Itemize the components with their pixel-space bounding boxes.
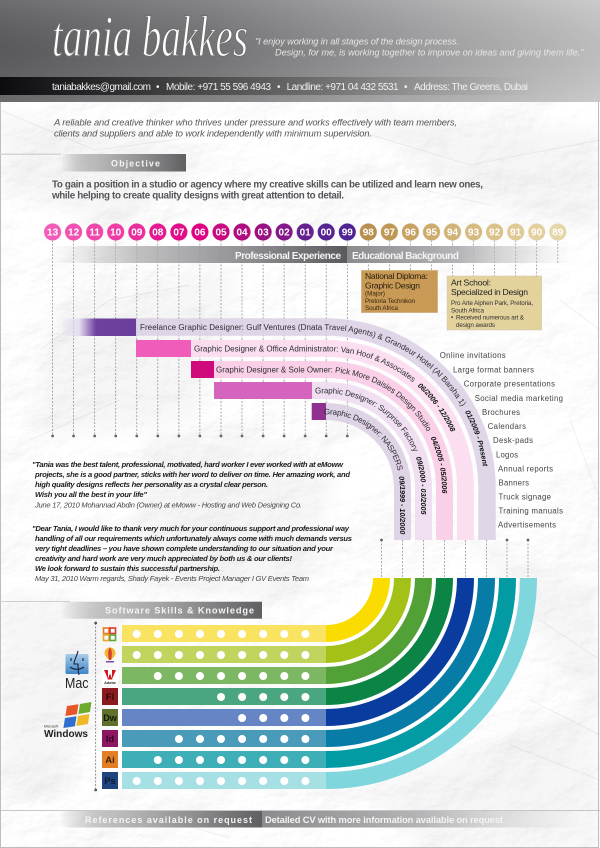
testimonial 1 <box>32 460 350 510</box>
objective text: To gain a position in a studio or agency where my creative skills can be utilized and learn new ones, <box>52 179 483 190</box>
name: tania bakkes <box>52 4 248 69</box>
list of design services: Brochures <box>482 408 520 417</box>
education box: national diploma <box>361 270 438 313</box>
icon: flash: Fl <box>106 692 114 703</box>
windows logo: Microsoft <box>44 724 58 728</box>
software icon column <box>94 622 118 791</box>
experience band 4: surprise factory <box>214 382 432 540</box>
software skills heading <box>0 601 262 619</box>
skills rainbow arcs <box>326 578 528 780</box>
experience band 5: naspers: 09/1999 - 10/2000 <box>399 476 406 534</box>
year circles: 08 <box>152 228 164 239</box>
testimonial 1: high quality designs reflects her personality as a crystal clear person. <box>35 480 268 489</box>
year circles: 07 <box>173 228 185 239</box>
year circles: 12 <box>68 228 80 239</box>
section bar: professional experience: Professional Experience <box>235 251 341 262</box>
education box: national diploma: National Diploma: <box>365 271 428 281</box>
icon: indesign <box>102 730 118 747</box>
contact details <box>52 82 528 93</box>
objective heading: Objective <box>111 159 160 169</box>
year circles: 98 <box>363 228 374 239</box>
icon: adobe: Adobe <box>104 681 116 685</box>
section bar: professional experience <box>50 246 347 263</box>
education box: art school: • <box>451 315 453 322</box>
education box: national diploma: (Major) <box>365 290 385 298</box>
experience band 1: freelance: Freelance Graphic Designer: Gulf Ventures (Dnata Travel Agents) & Grandeur Hotel (Al Barsha 1) <box>140 324 466 406</box>
list of design services: Calendars <box>488 422 526 431</box>
list of design services: Corporate presentations <box>464 380 555 389</box>
testimonial 2: creativity and hard work are very much appreciated by both us & our clients! <box>35 554 292 563</box>
experience band 3: sole owner <box>191 361 453 540</box>
testimonial 1: June 17, 2010 Mohannad Abdin (Owner) at eMoww - Hosting and Web Designing Co. <box>34 500 302 510</box>
experience band 2: office administrator: Graphic Designer & Office Administrator: Van Hoof & Associates <box>194 346 415 382</box>
year circles: 02 <box>279 228 290 239</box>
timeline dotted guides <box>51 240 558 437</box>
contact details: Mobile: +971 55 596 4943 <box>166 82 271 93</box>
objective text <box>51 179 483 201</box>
year circles: 93 <box>468 228 480 239</box>
year circles: 10 <box>110 228 122 239</box>
contact details: • <box>277 82 281 93</box>
icon: illustrator: Ai <box>105 755 115 766</box>
windows logo <box>44 702 92 740</box>
education box: art school <box>447 276 542 330</box>
contact details: • <box>156 82 160 93</box>
connector dots to skills rainbow <box>380 539 529 578</box>
experience band 5: naspers <box>312 403 411 540</box>
year circles: 06 <box>194 228 206 239</box>
footer <box>0 810 600 828</box>
testimonial 1: "Tania was the best talent, professional, motivated, hard worker I ever worked with at eMoww <box>32 460 344 469</box>
year circles: 89 <box>552 228 564 239</box>
list of design services: Advertisements <box>498 520 556 529</box>
experience band 4: surprise factory: 09/2000 - 03/2005 <box>416 457 426 515</box>
year circles: 00 <box>321 228 332 239</box>
year circles: 94 <box>447 228 458 239</box>
list of design services: Online invitations <box>440 351 506 360</box>
year circles: 13 <box>47 228 59 239</box>
intro statement <box>53 116 457 138</box>
objective heading <box>0 154 186 172</box>
section bar: educational background <box>347 246 572 263</box>
intro statement: A reliable and creative thinker who thrives under pressure and works effectively with team members, <box>53 116 457 128</box>
skills horizontal bars <box>122 625 326 789</box>
year circles <box>44 223 566 241</box>
experience band 5: naspers: Graphic Designer: NASPERS <box>324 408 403 470</box>
year circles: 05 <box>215 228 227 239</box>
experience band 3: sole owner: 04/2005 - 05/2006 <box>431 436 447 494</box>
icon: adobe <box>102 668 118 685</box>
year circles: 03 <box>258 228 269 239</box>
windows logo: Windows <box>44 728 88 740</box>
list of design services: Social media marketing <box>475 394 563 403</box>
list of design services: Large format banners <box>453 366 534 374</box>
contact details: taniabakkes@gmail.com <box>52 82 151 93</box>
year circles: 09 <box>131 228 143 239</box>
intro statement: clients and suppliers and able to work independently with minimum supervision. <box>54 128 372 138</box>
personal quote <box>255 36 584 58</box>
year circles: 11 <box>89 228 100 239</box>
header band <box>0 0 600 102</box>
list of design services: Logos <box>496 450 518 459</box>
skill level dots <box>133 630 309 785</box>
year circles: 99 <box>342 228 353 239</box>
experience band 1: freelance <box>64 318 496 540</box>
list of design services: Annual reports <box>498 464 553 473</box>
software skills heading: Software Skills & Knowledge <box>105 606 254 616</box>
experience band 2: office administrator <box>136 340 474 540</box>
icon: flash <box>102 688 118 705</box>
list of design services: Truck signage <box>498 492 551 501</box>
education box: art school: design awards <box>456 322 495 329</box>
footer left bar <box>60 811 262 828</box>
footer right bar <box>262 811 582 828</box>
testimonial 2: handling of all our requirements which unfortunately always come with much demands versus <box>35 534 352 543</box>
footer right bar: Detailed CV with more information available on request <box>265 815 503 825</box>
year circles: 04 <box>236 228 248 239</box>
icon: illustrator <box>102 751 118 768</box>
contact details: Landline: +971 04 432 5531 <box>287 82 399 93</box>
year circles: 92 <box>489 228 501 239</box>
experience band 2: office administrator: 06/2006 - 12/2008 <box>418 384 456 432</box>
contact strip <box>0 77 540 95</box>
year circles: 95 <box>426 228 437 239</box>
objective text: while helping to create quality designs with great attention to detail. <box>51 190 344 201</box>
experience band 4: surprise factory: Graphic Designer: Surprise Factory <box>315 388 418 451</box>
testimonial 2: "Dear Tania, I would like to thank very much for your continuous support and professional way <box>32 524 350 533</box>
footer left bar: References available on request <box>85 815 252 825</box>
testimonial 2: very tight deadlines – you have shown complete understanding to our situation and your <box>35 544 334 553</box>
year circles: 01 <box>300 228 311 239</box>
list of design services: Banners <box>498 478 529 487</box>
education box: art school: South Africa <box>451 307 484 314</box>
mac logo: Mac <box>65 676 88 692</box>
testimonial 1: projects, she is a good partner, sticks with her word to deliver on time. Her amazing work, and <box>34 470 350 479</box>
section bar: educational background: Educational Background <box>352 251 459 262</box>
year circles: 97 <box>384 228 395 239</box>
education box: art school: Art School: <box>451 278 491 288</box>
education box: national diploma: Pretoria Technikon <box>365 298 415 305</box>
mac logo <box>65 651 88 692</box>
year circles: 91 <box>510 228 522 239</box>
list of design services: Desk-pads <box>493 436 533 445</box>
testimonial 2: We look forward to sustain this successful partnership. <box>35 564 220 573</box>
year circles: 90 <box>531 228 543 239</box>
contact details: • <box>404 82 408 93</box>
education box: art school: Received numerous art & <box>456 315 525 322</box>
icon: office <box>104 628 116 640</box>
education box: national diploma: Graphic Design <box>365 280 420 290</box>
icon: photoshop: Ps <box>104 776 116 787</box>
icon: indesign: Id <box>106 734 114 745</box>
list of design services <box>440 351 563 529</box>
icon: dreamweaver <box>102 709 118 726</box>
year circles: 96 <box>405 228 416 239</box>
experience band 3: sole owner: Graphic Designer & Sole Owner: Pick More Daisies Design Studio <box>216 366 430 431</box>
contact details: Address: The Greens, Dubai <box>414 82 528 93</box>
experience band 1: freelance: 01/2009 - Present <box>465 410 488 466</box>
education box: national diploma: South Africa <box>365 305 398 312</box>
list of design services: Training manuals <box>498 506 563 515</box>
education box: art school: Pro Arte Alphen Park, Pretoria, <box>451 300 533 307</box>
testimonial 1: Wish you all the best in your life" <box>35 490 147 499</box>
personal quote: "I enjoy working in all stages of the design process. <box>255 36 459 46</box>
icon: dreamweaver: Dw <box>103 713 118 723</box>
personal quote: Design, for me, is working together to improve on ideas and giving them life." <box>275 48 584 58</box>
education box: art school: Specialized in Design <box>451 287 528 297</box>
icon: photoshop <box>102 772 118 789</box>
icon: corel balloon <box>104 648 116 662</box>
testimonial 2: May 31, 2010 Warm regards, Shady Fayek - Events Project Manager I GV Events Team <box>35 574 309 583</box>
testimonial 2 <box>32 524 352 583</box>
